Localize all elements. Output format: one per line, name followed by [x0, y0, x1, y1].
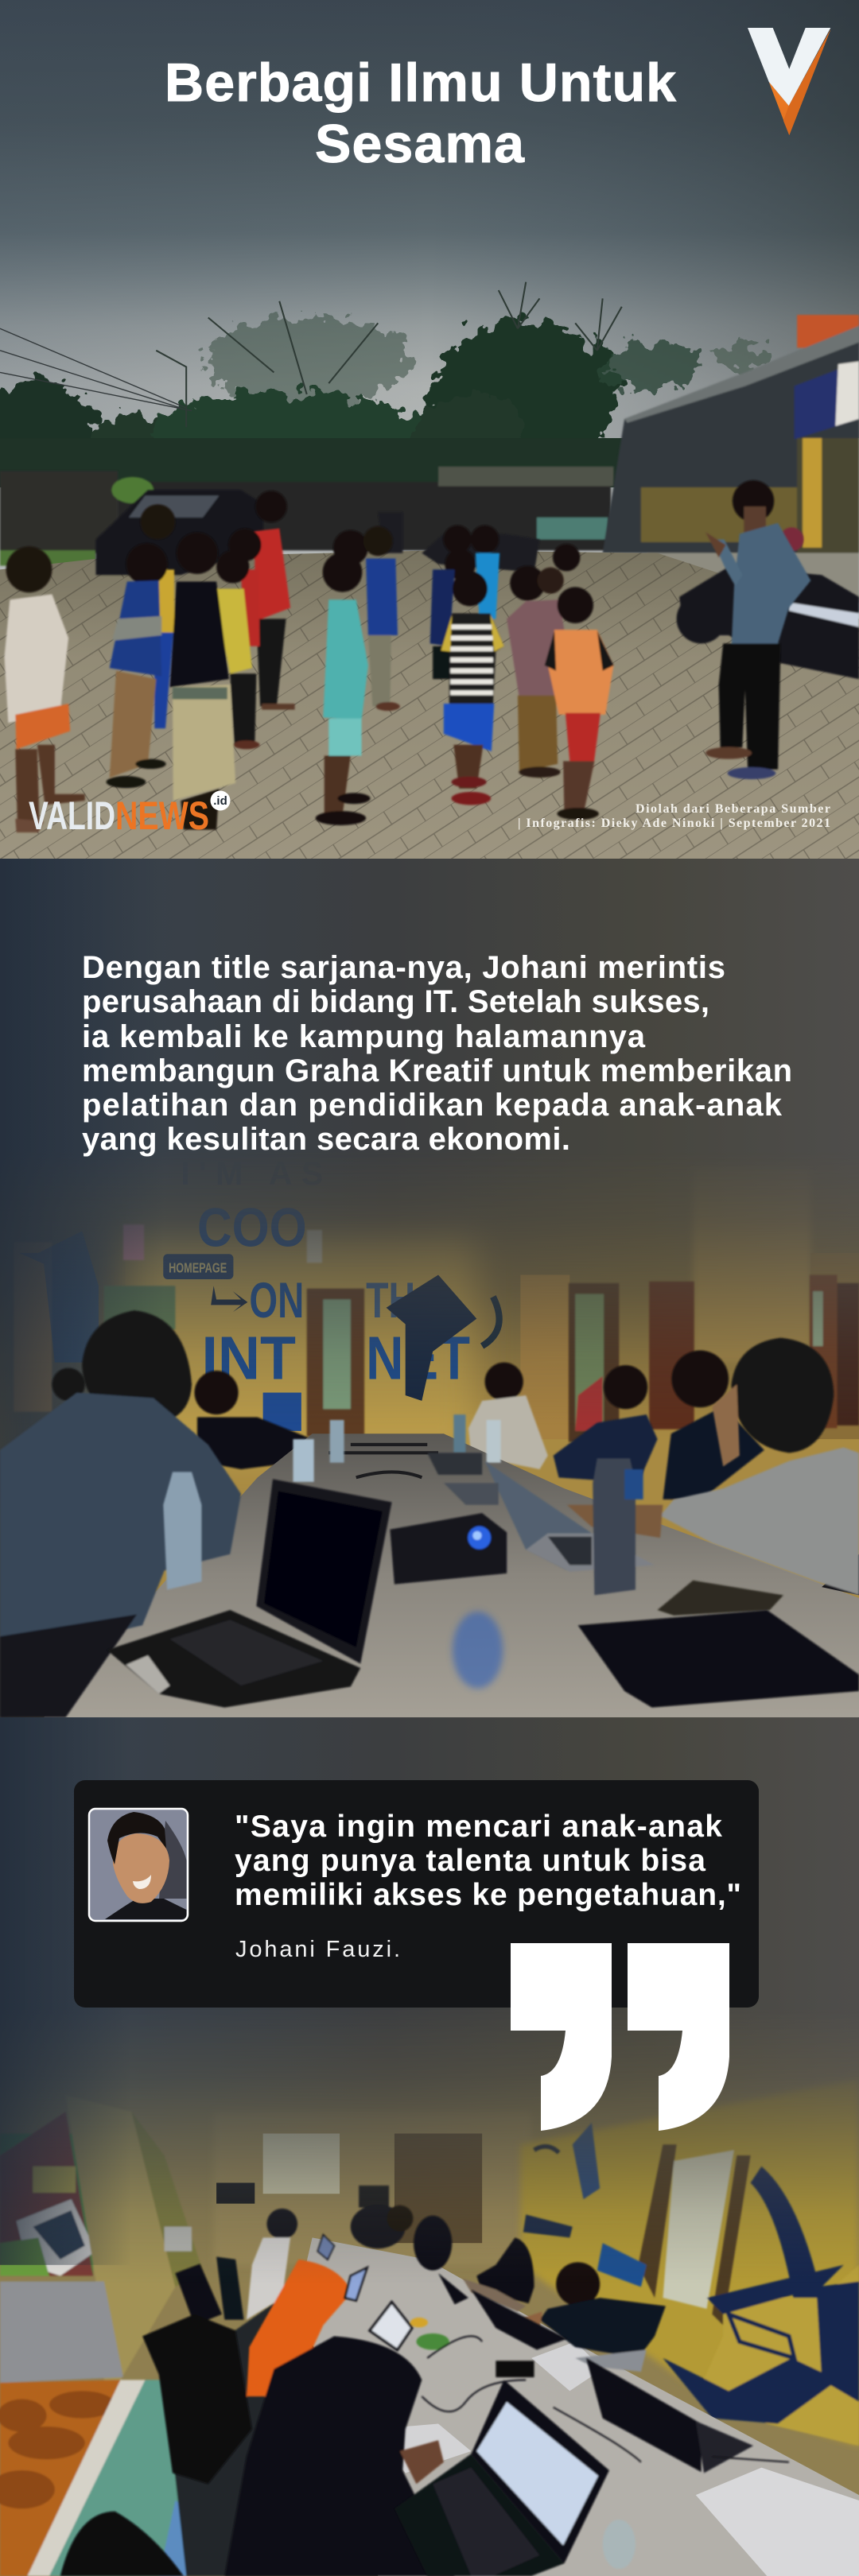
snacks and power strip [410, 2318, 636, 2569]
courtyard paving [0, 550, 859, 859]
left mural, pillar and floor [0, 2095, 383, 2576]
wall mural lettering: INT [201, 1324, 296, 1392]
child in white shirt [5, 546, 85, 832]
child in orange hijab [247, 2260, 352, 2396]
icon: large closing quotation marks [511, 1943, 729, 2131]
instructor standing [705, 480, 810, 779]
parked car and motorbikes [96, 490, 859, 679]
title [165, 52, 676, 174]
wall mural lettering: COO [197, 1197, 307, 1259]
children seated along the table [60, 2186, 666, 2576]
quote text: memiliki akses ke pengetahuan," [235, 1878, 741, 1912]
girl in black hijab [463, 2237, 534, 2311]
wall mural lettering: ON [249, 1273, 304, 1329]
top dark gradient overlay [0, 859, 859, 1717]
child in red shirt [255, 491, 295, 710]
child in red behind yellow shirt [228, 529, 262, 646]
black laptop on the left [107, 1479, 391, 1708]
laptops on the table [317, 2235, 789, 2576]
credits text [518, 802, 830, 830]
child in mauve vest [507, 544, 580, 778]
child in dark blue shirt, centre [333, 526, 400, 711]
child in yellow shirt [214, 550, 259, 749]
chairs [142, 2256, 252, 2484]
logo: Validnews.id [29, 790, 231, 838]
left shadow [0, 859, 165, 1717]
building on the right [603, 315, 859, 603]
man on left, far side [52, 1368, 313, 1469]
wall mural lettering: HOMEPAGE [169, 1260, 227, 1276]
man in foreground left [0, 1310, 241, 1717]
wall mural lettering: I'M AS [181, 1155, 323, 1192]
tree line [0, 282, 778, 487]
closed black laptop on the right [578, 1610, 859, 1708]
panel: section 1 photo of children in courtyard [0, 0, 859, 859]
child in teal shirt [316, 553, 371, 825]
man in black t-shirt [663, 1351, 764, 1499]
brochure [658, 1581, 783, 1616]
title: Sesama [315, 114, 525, 174]
group of children [5, 491, 613, 832]
bottles [163, 1414, 501, 1590]
body text: ia kembali ke kampung halamannya [82, 1019, 646, 1054]
doors and windows [14, 1224, 859, 1442]
body text: yang kesulitan secara ekonomi. [82, 1122, 570, 1157]
student in foreground, black hijab [224, 2336, 496, 2576]
other laptops [317, 2235, 567, 2350]
quote text: "Saya ingin mencari anak-anak [235, 1810, 722, 1844]
body text [82, 950, 792, 1157]
body text: Dengan title sarjana-nya, Johani merintis [82, 950, 725, 985]
logo: Validnews.id: NEWS [115, 793, 209, 838]
title: Berbagi Ilmu Untuk [165, 52, 676, 113]
panel: section 3 photo of children's computer class [0, 1717, 859, 2576]
long white table [296, 2237, 859, 2576]
wall mural lettering [19, 1155, 499, 1431]
child in blue jacket [107, 543, 168, 788]
logo: Validnews.id: VALID [29, 793, 115, 838]
child in orange shirt [545, 587, 613, 820]
attribution: Johani Fauzi. [235, 1937, 400, 1962]
quote text: yang punya talenta untuk bisa [235, 1844, 705, 1878]
credits text: Diolah dari Beberapa Sumber [636, 802, 830, 816]
sky background [0, 0, 859, 619]
quote text [235, 1810, 741, 1912]
meeting table [44, 1433, 859, 1717]
man with glasses in navy shirt [554, 1365, 658, 1483]
back wall [0, 1717, 859, 2576]
logo: Validnews.id: .id [213, 794, 227, 808]
top dark gradient overlay [0, 1717, 859, 2576]
wall mural lettering: NET [366, 1324, 470, 1392]
man in white t-shirt [468, 1363, 548, 1469]
window and mural on right wall [523, 2123, 859, 2446]
people in background [52, 1351, 764, 1499]
icon: V logo top right [748, 28, 830, 135]
cables [422, 2336, 789, 2462]
panel: quote card [74, 1780, 759, 2008]
credits text: | Infografis: Dieky Ade Ninoki | September 2021 [518, 817, 830, 830]
child with yellow shirt, back row [134, 504, 175, 728]
man in foreground right [567, 1338, 859, 1595]
child in light blue shirt [471, 526, 499, 619]
child in black shirt with sarong [170, 532, 235, 830]
foreground laptop [395, 2380, 609, 2576]
room wall [0, 859, 859, 1717]
child in striped shirt [441, 571, 504, 805]
wall mural lettering: TH [366, 1273, 415, 1329]
person in the bottom left corner [60, 2512, 184, 2576]
panel: section 2 photo of meeting room [0, 859, 859, 1717]
right laptop [586, 2358, 753, 2473]
boy at the laptop [518, 2262, 666, 2372]
child in navy shirt [430, 526, 476, 679]
low stone wall [0, 467, 613, 566]
projector [390, 1513, 507, 1585]
body text: membangun Graha Kreatif untuk memberikan [82, 1053, 792, 1088]
left shadow [0, 1717, 131, 2265]
body text: perusahaan di bidang IT. Setelah sukses, [82, 984, 709, 1019]
children at far end [247, 2186, 452, 2320]
silver laptop [427, 1453, 655, 1595]
portrait of Johani Fauzi [89, 1809, 188, 1921]
body text: pelatihan dan pendidikan kepada anak-anak [82, 1088, 783, 1123]
